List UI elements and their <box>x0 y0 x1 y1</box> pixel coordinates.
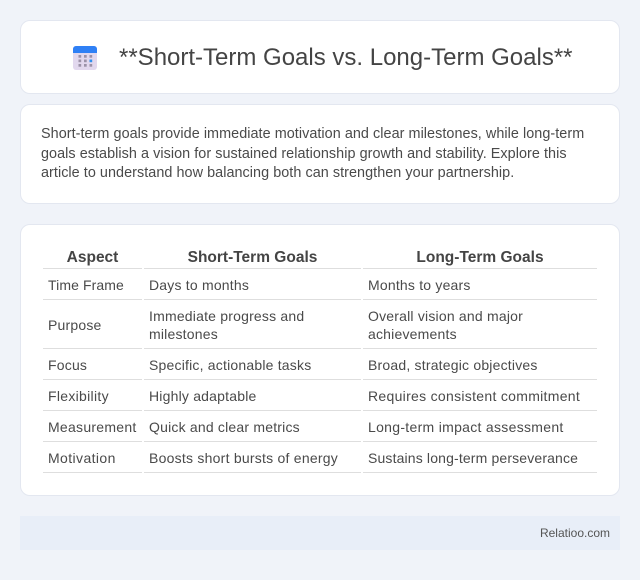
row: purpose: Purpose <box>48 317 102 333</box>
panel: title card <box>20 20 620 94</box>
row: motivation <box>43 450 597 473</box>
row: focus: Specific, actionable tasks <box>149 357 311 373</box>
panel: introduction <box>20 104 620 204</box>
row: purpose <box>43 308 597 349</box>
table header <box>43 249 597 269</box>
row: purpose: achievements <box>368 326 457 342</box>
row: focus: Focus <box>48 357 87 373</box>
row: time frame <box>43 277 597 300</box>
row: time frame: Time Frame <box>48 277 124 293</box>
row: motivation: Sustains long-term perseverance <box>368 450 578 466</box>
table header: Long-Term Goals <box>416 249 544 266</box>
row: time frame: Months to years <box>368 277 471 293</box>
row: measurement: Quick and clear metrics <box>149 419 300 435</box>
row: purpose: Overall vision and major <box>368 308 523 324</box>
panel: comparison table <box>20 224 620 496</box>
text block: introduction <box>41 126 584 181</box>
row: flexibility: Requires consistent commitment <box>368 388 580 404</box>
row: motivation: Boosts short bursts of energy <box>149 450 338 466</box>
row: time frame: Days to months <box>149 277 249 293</box>
row: measurement <box>43 419 597 442</box>
row: flexibility: Highly adaptable <box>149 388 256 404</box>
text block: introduction: goals establish a vision for sustained relationship growth and stability. Explore this <box>41 146 567 162</box>
row: flexibility <box>43 388 597 411</box>
row: purpose: milestones <box>149 326 218 342</box>
footer bar <box>20 516 620 550</box>
row: focus <box>43 357 597 380</box>
table header: Short-Term Goals <box>188 249 317 266</box>
row: motivation: Motivation <box>48 450 116 466</box>
row: flexibility: Flexibility <box>48 388 109 404</box>
table header: Aspect <box>67 249 118 266</box>
row: purpose: Immediate progress and <box>149 308 304 324</box>
footer credit: Relatioo.com <box>540 526 610 540</box>
icon: calendar <box>73 46 97 70</box>
text block: introduction: article to understand how balancing both can strengthen your partnership. <box>41 165 514 181</box>
title: **Short-Term Goals vs. Long-Term Goals** <box>119 44 572 71</box>
text block: introduction: Short-term goals provide immediate motivation and clear milestones, while long-term <box>41 126 584 142</box>
row: focus: Broad, strategic objectives <box>368 357 538 373</box>
row: measurement: Long-term impact assessment <box>368 419 564 435</box>
row: measurement: Measurement <box>48 419 137 435</box>
